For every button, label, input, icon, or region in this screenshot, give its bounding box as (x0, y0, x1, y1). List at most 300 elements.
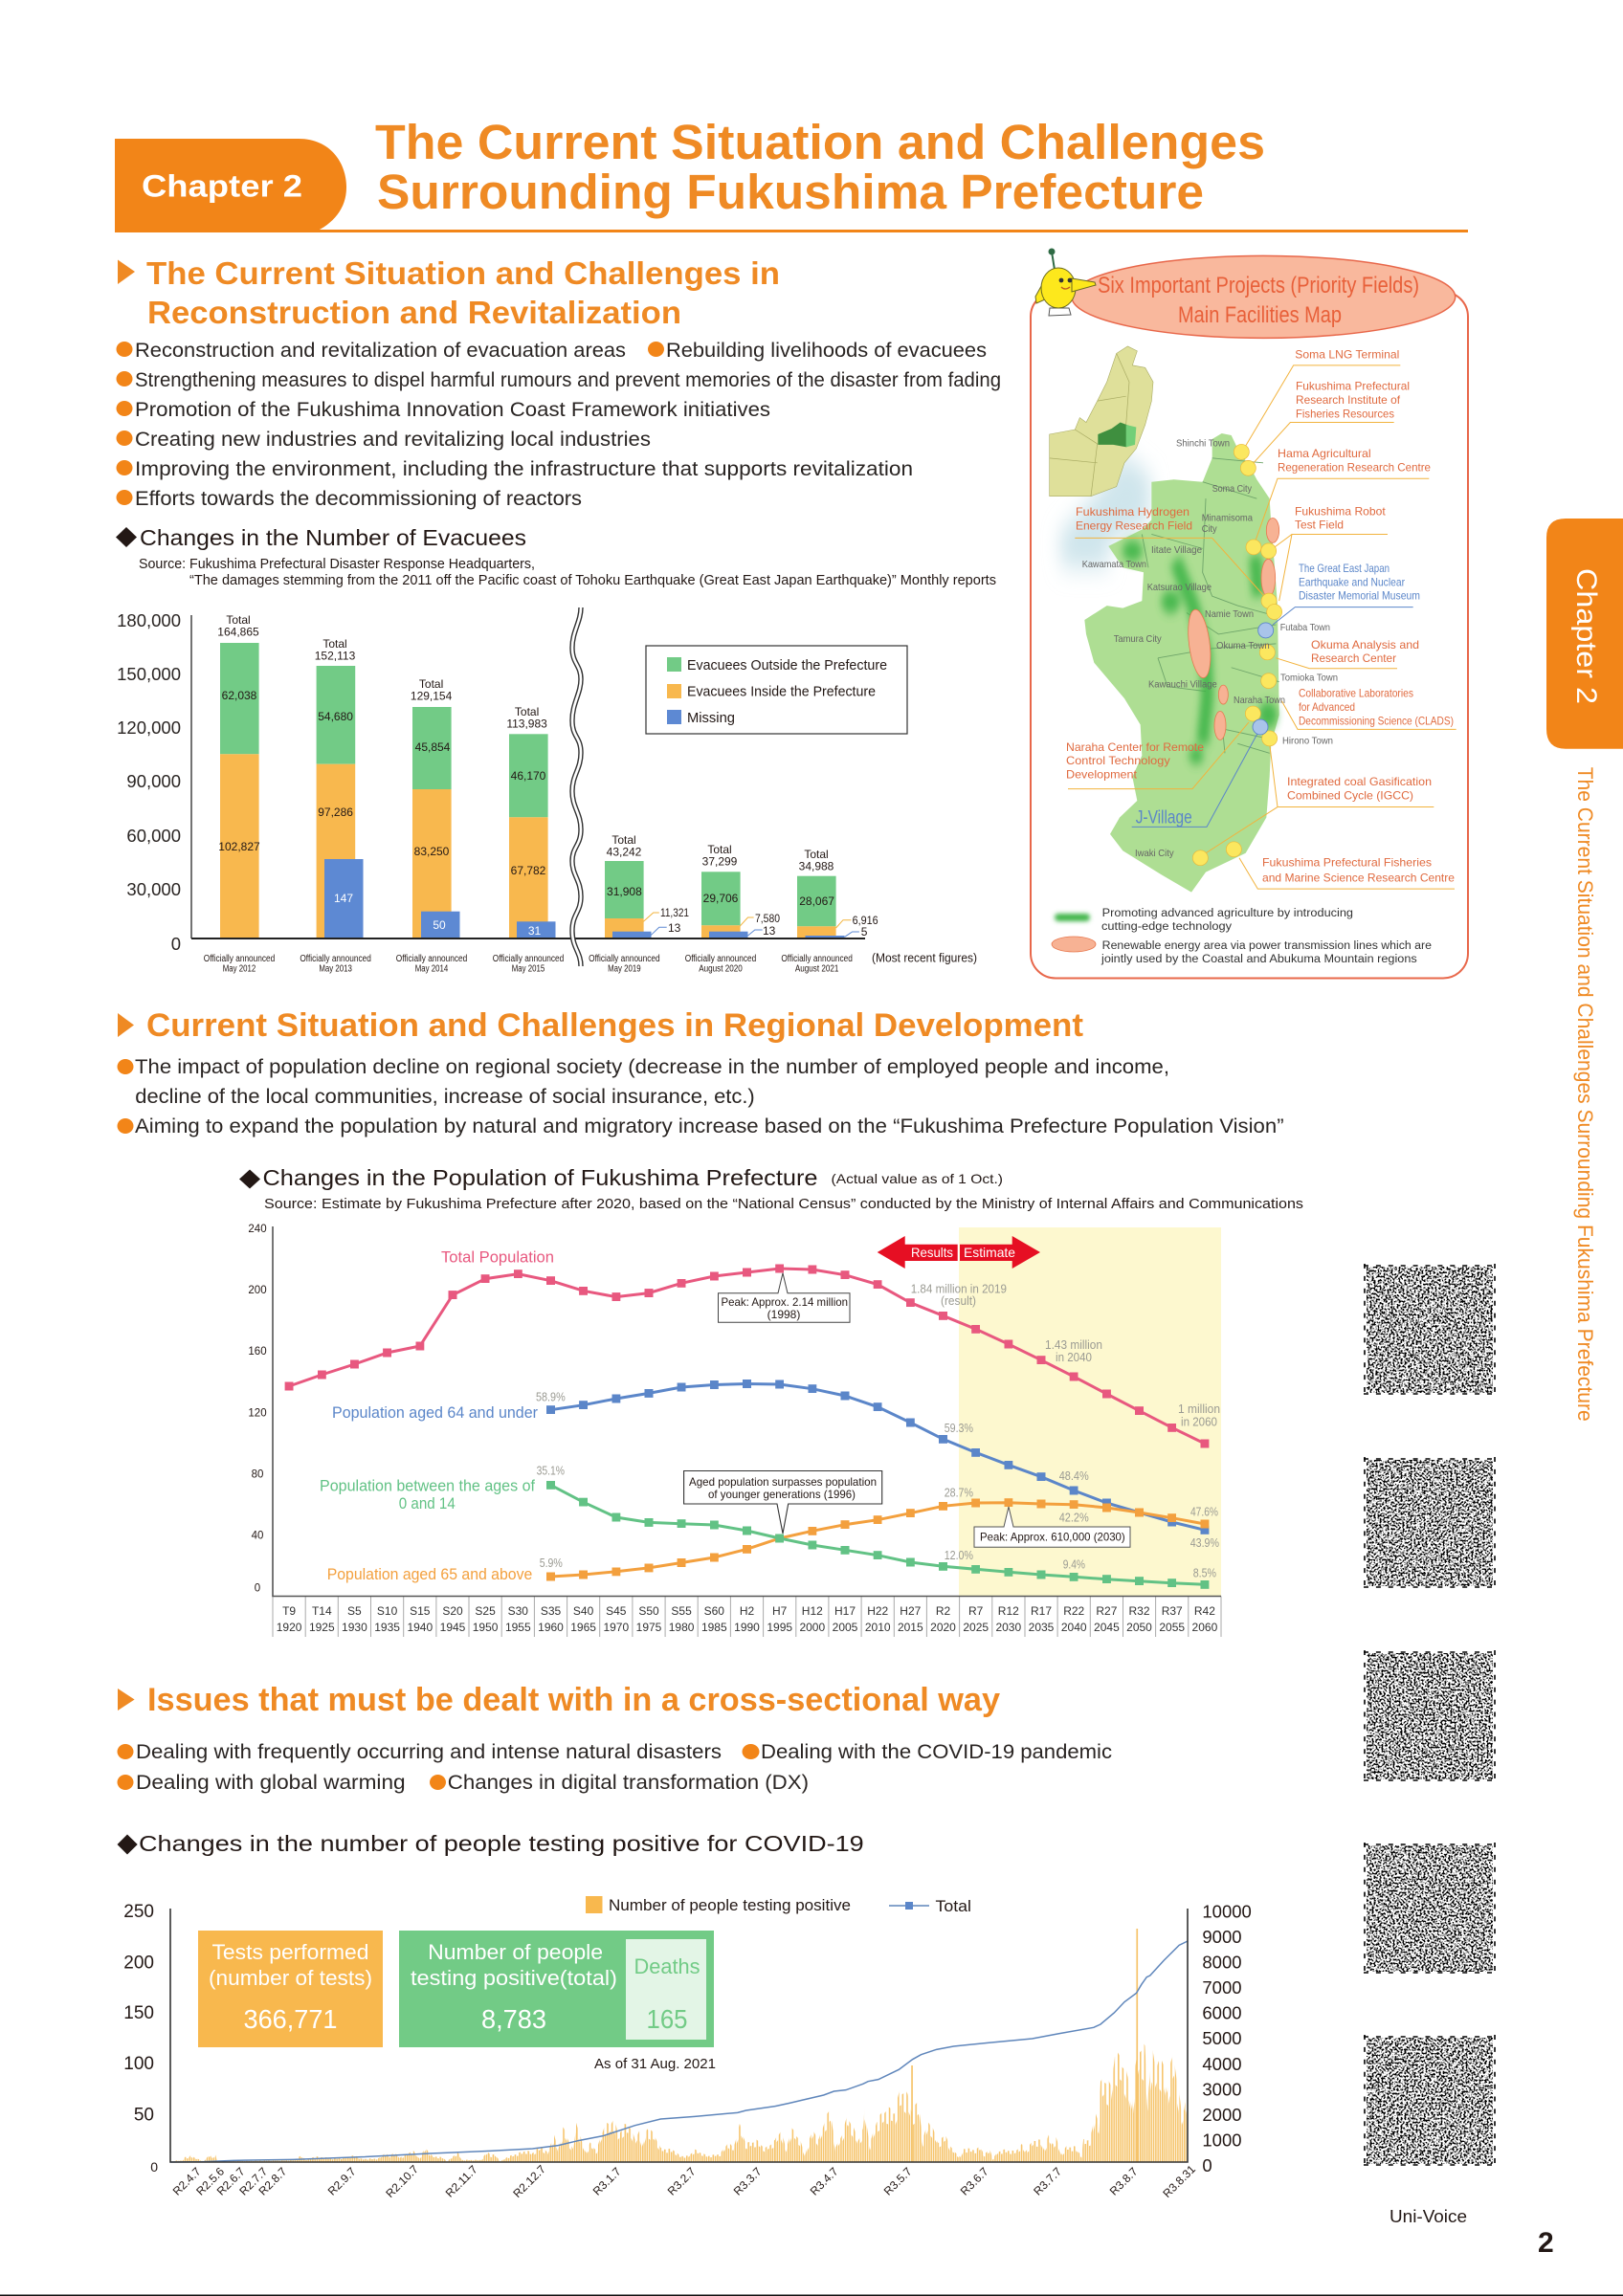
percentage and figure annotations: 35.1% (537, 1465, 565, 1478)
percentage and figure annotations: 42.2% (1059, 1512, 1089, 1525)
percentage and figure annotations: 12.0% (945, 1549, 973, 1562)
percentage and figure annotations: 9.4% (1063, 1558, 1085, 1572)
era and year axis labels: S40 (573, 1604, 594, 1618)
voice code 4 (1364, 1843, 1496, 1975)
series labels: Population aged 65 and above (327, 1565, 532, 1583)
small value labels: 5 (861, 925, 868, 938)
municipal borders (1142, 458, 1279, 753)
facility labels (1066, 347, 1455, 885)
facility labels: Research Center (1311, 651, 1396, 665)
left axis labels: 250 (123, 1902, 154, 1922)
category labels: May 2015 (512, 964, 545, 974)
side tab: chapter 2 (1546, 519, 1623, 749)
callout: peak 610,000 (974, 1507, 1130, 1547)
box: tests performed: (number of tests) (209, 1966, 372, 1990)
era and year axis labels: T14 (312, 1604, 332, 1618)
bullet list: cross-sectional issues: Dealing with the COVID-19 pandemic (761, 1741, 1112, 1763)
category labels: May 2013 (319, 964, 352, 974)
percentage and figure annotations: 43.9% (1190, 1536, 1219, 1550)
bar value labels: 28,067 (799, 894, 834, 908)
right axis labels: 0 (1202, 2155, 1212, 2175)
category labels: August 2021 (795, 964, 839, 974)
small value labels: 6,916 (853, 914, 878, 927)
era and year axis labels: 2020 (930, 1621, 956, 1634)
box: positive total and deaths: 8,783 (481, 2004, 546, 2034)
heading: changes in population: (Actual value as of 1 Oct.) (831, 1171, 1003, 1186)
town labels (1082, 437, 1338, 859)
facility labels: Control Technology (1066, 754, 1170, 767)
chapter tab (115, 139, 346, 232)
series: population between 0 and 14 (551, 1485, 1205, 1584)
series labels (320, 1247, 554, 1583)
percentage and figure annotations: 8.5% (1193, 1567, 1216, 1580)
era and year axis labels: R37 (1162, 1604, 1183, 1618)
category labels: May 2012 (223, 964, 256, 974)
era and year axis labels: R32 (1128, 1604, 1150, 1618)
era and year axis labels: S10 (377, 1604, 398, 1618)
era and year axis labels: S35 (541, 1604, 561, 1618)
facility labels: Decommissioning Science (CLADS) (1299, 714, 1454, 727)
bar value labels: 83,250 (414, 845, 450, 858)
side tab: chapter 2: Chapter 2 (1570, 568, 1602, 704)
facility labels: Fukushima Prefectural (1296, 380, 1410, 393)
percentage and figure annotations: in 2040 (1056, 1351, 1092, 1364)
bars blue (324, 859, 844, 938)
facility labels: Naraha Center for Remote (1066, 740, 1204, 754)
era and year axis labels: 2040 (1061, 1621, 1087, 1634)
bullet list: cross-sectional issues (117, 1741, 1112, 1794)
heading: covid-19: Changes in the number of people testing positive for COVID-19 (139, 1831, 864, 1856)
uni-voice label: Uni-Voice (1390, 2207, 1467, 2226)
category labels: Officially announced (300, 954, 371, 964)
era and year axis labels: 2030 (995, 1621, 1021, 1634)
date labels: R2.11.7 (443, 2162, 480, 2200)
date labels: R2.8.7 (256, 2164, 290, 2198)
deaths box: 165 (647, 2004, 687, 2034)
era and year axis labels: S45 (606, 1604, 627, 1618)
town labels: City (1202, 523, 1217, 535)
era and year axis labels: 2045 (1094, 1621, 1120, 1634)
axes (170, 1909, 1188, 2162)
right axis labels: 3000 (1202, 2079, 1242, 2099)
era and year axis labels: 1930 (342, 1621, 367, 1634)
date labels: R2.9.7 (325, 2164, 359, 2198)
era and year axis labels: 2015 (898, 1621, 923, 1634)
town labels: Kawauchi Village (1148, 679, 1217, 691)
map frame (1031, 292, 1468, 978)
total labels: 129,154 (411, 689, 453, 702)
y axis labels: 200 (248, 1285, 267, 1296)
era and year axis labels: S60 (704, 1604, 724, 1618)
map title ellipse (1072, 255, 1456, 338)
bullet list: reconstruction: Efforts towards the decommissioning of reactors (135, 488, 582, 510)
page number: 2 (1538, 2227, 1554, 2259)
small value labels: 13 (763, 924, 776, 938)
total labels: Total (707, 843, 732, 856)
town labels: Shinchi Town (1176, 437, 1230, 449)
era and year axis labels: H12 (802, 1604, 823, 1618)
y axis labels: 90,000 (126, 771, 181, 791)
era and year axis labels: H2 (740, 1604, 754, 1618)
bullet list: reconstruction: Promotion of the Fukushima Innovation Coast Framework initiatives (135, 399, 770, 421)
left axis labels: 200 (123, 1954, 154, 1974)
daily positive bars (170, 1929, 1187, 2162)
box: positive total and deaths: testing positive(total) (411, 1966, 617, 1990)
era and year axis labels: 2000 (799, 1621, 825, 1634)
voice code 3 (1364, 1650, 1496, 1782)
era and year axis labels: H17 (834, 1604, 856, 1618)
heading: changes in number of evacuees: Source: Fukushima Prefectural Disaster Response Headquarters, (139, 557, 535, 572)
facility labels: The Great East Japan (1299, 562, 1390, 575)
facility labels: Integrated coal Gasification (1287, 775, 1432, 788)
percentage and figure annotations: 58.9% (536, 1391, 566, 1404)
right axis labels: 10000 (1202, 1901, 1252, 1921)
y axis labels: 60,000 (126, 826, 181, 846)
date labels: R3.8.7 (1107, 2164, 1141, 2198)
percentage and figure annotations: 1.43 million (1045, 1338, 1102, 1352)
facility labels: Development (1066, 768, 1138, 782)
town labels: Tamura City (1114, 633, 1162, 645)
era and year axis labels: 2035 (1029, 1621, 1055, 1634)
facility labels: Disaster Memorial Museum (1299, 589, 1420, 603)
results / estimate arrows (878, 1236, 1040, 1269)
town labels: Futaba Town (1280, 622, 1330, 633)
era and year axis labels: S5 (347, 1604, 362, 1618)
date labels: R2.6.7 (214, 2164, 248, 2198)
bar value labels: 31,908 (607, 885, 642, 898)
heading: changes in number of evacuees: “The damages stemming from the 2011 off the Pacific coast of Tohoku Earthquake (Great East Japan Earthquake)” Monthly reports (189, 573, 996, 588)
era and year axis labels: 1935 (374, 1621, 400, 1634)
box: tests performed: Tests performed (212, 1940, 369, 1964)
series labels: Population between the ages of (320, 1476, 535, 1494)
bars orange (220, 754, 836, 938)
era and year axis labels: 1945 (440, 1621, 466, 1634)
section heading: regional development: Current Situation and Challenges in Regional Development (146, 1007, 1083, 1044)
axis break (572, 607, 581, 966)
box: positive total and deaths (399, 1931, 714, 2047)
callout: peak 610,000: Peak: Approx. 610,000 (2030) (980, 1531, 1125, 1544)
date labels: R2.4.7 (170, 2164, 204, 2198)
map legend: cutting-edge technology (1101, 921, 1232, 933)
bullet list: regional development: decline of the local communities, increase of social insurance, etc.) (135, 1086, 755, 1108)
percentage and figure annotations: (result) (941, 1294, 976, 1308)
era and year axis labels: 1960 (538, 1621, 564, 1634)
bullet list: cross-sectional issues: Changes in digital transformation (DX) (448, 1772, 809, 1794)
small value leaders (643, 913, 859, 937)
right axis labels: 7000 (1202, 1977, 1242, 1998)
percentage and figure annotations: 59.3% (945, 1422, 973, 1435)
category labels: Officially announced (493, 954, 564, 964)
bar value labels: 45,854 (415, 740, 451, 754)
map title ellipse: Main Facilities Map (1178, 302, 1342, 328)
bar value labels: 46,170 (511, 769, 546, 783)
as-of note: As of 31 Aug. 2021 (594, 2056, 716, 2072)
bullet list: cross-sectional issues: Dealing with global warming (136, 1772, 406, 1794)
facility labels: Soma LNG Terminal (1295, 347, 1399, 361)
date labels: R3.8.31 (1160, 2162, 1198, 2200)
bar value labels: 97,286 (318, 806, 353, 819)
date labels: R3.1.7 (590, 2164, 624, 2198)
category labels: Officially announced (685, 954, 756, 964)
bullet list: reconstruction: Reconstruction and revitalization of evacuation areas (135, 340, 626, 362)
date labels: R2.12.7 (510, 2162, 548, 2200)
facility labels: for Advanced (1299, 700, 1355, 714)
bullet list: regional development: The impact of population decline on regional society (decrease in the number of employed people and income, (135, 1056, 1169, 1078)
callout: peak 2.14 million: Peak: Approx. 2.14 million (722, 1295, 848, 1309)
bullet list: regional development (117, 1056, 1284, 1137)
date labels: R2.10.7 (383, 2162, 421, 2200)
mascot (1035, 249, 1096, 316)
facility labels: and Marine Science Research Centre (1262, 872, 1455, 885)
axes (273, 1596, 1221, 1637)
era and year axis labels: R17 (1031, 1604, 1052, 1618)
y axis labels: 30,000 (126, 879, 181, 899)
bar value labels: 102,827 (218, 840, 260, 853)
callout: peak 2.14 million (718, 1273, 850, 1322)
era and year axis labels: 2010 (865, 1621, 891, 1634)
town labels: Hirono Town (1282, 735, 1333, 746)
percentage and figure annotations: 5.9% (540, 1556, 563, 1570)
bar value labels: 54,680 (318, 710, 353, 723)
chart legend: Total (936, 1897, 971, 1915)
results / estimate arrows: Estimate (964, 1245, 1015, 1260)
right axis labels: 8000 (1202, 1952, 1242, 1973)
series labels: 0 and 14 (399, 1494, 456, 1512)
category labels (204, 951, 977, 974)
right axis labels: 1000 (1202, 2130, 1242, 2151)
bar value labels: 62,038 (222, 689, 257, 702)
town labels: Namie Town (1205, 608, 1254, 620)
right axis labels: 2000 (1202, 2105, 1242, 2125)
y axis labels: 120,000 (117, 718, 181, 738)
facility labels: Fisheries Resources (1296, 408, 1394, 421)
bullet list: reconstruction: Improving the environment, including the infrastructure that supports revitalization (135, 458, 913, 480)
total labels (217, 613, 834, 872)
total labels: 164,865 (217, 626, 259, 639)
total line (170, 1941, 1188, 2162)
era and year axis labels: H27 (900, 1604, 922, 1618)
estimate background (959, 1227, 1221, 1596)
facility labels: Fukushima Prefectural Fisheries (1262, 856, 1432, 870)
facility labels: Energy Research Field (1076, 519, 1192, 532)
pale sea (1059, 453, 1151, 567)
voice code 1 (1364, 1264, 1496, 1396)
era and year axis labels: 2005 (833, 1621, 858, 1634)
era and year axis labels: 1925 (309, 1621, 335, 1634)
left axis labels: 0 (150, 2159, 158, 2175)
era and year axis labels: 1950 (473, 1621, 499, 1634)
voice code 5 (1364, 2035, 1496, 2167)
series labels: Population aged 64 and under (332, 1403, 538, 1422)
box: positive total and deaths: Number of people (428, 1940, 603, 1964)
y axis labels: 160 (248, 1346, 267, 1358)
date labels (170, 2162, 1198, 2200)
bar value labels: 29,706 (703, 892, 739, 905)
percentage and figure annotations: 1.84 million in 2019 (911, 1282, 1007, 1295)
era and year axis labels: R12 (998, 1604, 1019, 1618)
category labels: May 2014 (415, 964, 449, 974)
era and year axis labels: 1975 (636, 1621, 662, 1634)
series: population aged 65 and above (551, 1503, 1205, 1577)
chart legend (586, 1896, 971, 1915)
percentage and figure annotations: in 2060 (1181, 1416, 1217, 1429)
facility labels: Fukushima Hydrogen (1076, 505, 1189, 519)
facility labels: Test Field (1295, 519, 1344, 532)
main title: The Current Situation and Challenges (375, 115, 1265, 169)
era and year axis labels: S15 (410, 1604, 431, 1618)
heading: changes in population: Source: Estimate by Fukushima Prefecture after 2020, based on the “National Census” conducted by the Ministry of Internal Affairs and Communications (264, 1196, 1303, 1212)
percentage and figure annotations: 28.7% (945, 1487, 973, 1500)
total labels: Total (804, 848, 829, 861)
chapter header (115, 115, 1468, 232)
town labels: Tomioka Town (1280, 673, 1338, 684)
bar value labels: 31 (528, 924, 541, 938)
y axis labels: 80 (252, 1469, 263, 1481)
map title ellipse: Six Important Projects (Priority Fields) (1098, 273, 1419, 298)
panel: facilities map (1031, 249, 1468, 978)
box: tests performed: 366,771 (243, 2004, 337, 2034)
section heading: reconstruction: The Current Situation and Challenges in (146, 255, 780, 291)
main title: Surrounding Fukushima Prefecture (377, 165, 1204, 219)
stacked bar chart: evacuees (117, 607, 977, 974)
heading: changes in population: Changes in the Population of Fukushima Prefecture (262, 1165, 817, 1190)
main title (375, 115, 1265, 219)
facility labels: Earthquake and Nuclear (1299, 576, 1405, 589)
side title: The Current Situation and Challenges Surrounding Fukushima Prefecture (1573, 767, 1597, 1422)
box: tests performed (198, 1931, 383, 2047)
facility markers (1192, 444, 1282, 866)
y axis labels: 240 (248, 1224, 267, 1235)
town labels: Naraha Town (1234, 695, 1285, 706)
era and year axis labels: R7 (968, 1604, 984, 1618)
bar value labels: 50 (433, 918, 446, 932)
bullet list: reconstruction: Creating new industries and revitalizing local industries (135, 429, 651, 451)
bar value labels: 147 (334, 892, 353, 905)
map legend: Promoting advanced agriculture by introducing (1102, 908, 1353, 919)
facility labels: Okuma Analysis and (1311, 638, 1419, 651)
right axis labels: 6000 (1202, 2003, 1242, 2023)
date labels: R2.7.7 (236, 2164, 270, 2198)
y axis labels: 0 (171, 934, 181, 954)
category labels: August 2020 (699, 964, 743, 974)
heading: changes in number of evacuees: Changes in the Number of Evacuees (140, 525, 526, 550)
fukushima coast region (1084, 433, 1279, 893)
heading: changes in population (239, 1165, 1303, 1212)
era and year axis labels: S55 (671, 1604, 692, 1618)
category labels: Officially announced (589, 954, 660, 964)
town labels: Minamisoma (1202, 513, 1253, 524)
map legend: jointly used by the Coastal and Abukuma Mountain regions (1101, 954, 1417, 965)
era and year axis labels: R22 (1063, 1604, 1085, 1618)
bullet list: reconstruction: Strengthening measures to dispel harmful rumours and prevent memories of the disaster from fading (135, 369, 1001, 391)
small value labels: 11,321 (660, 906, 689, 919)
y axis labels: 150,000 (117, 664, 181, 684)
town labels: Katsurao Village (1147, 582, 1212, 593)
facility labels: Fukushima Robot (1295, 505, 1386, 519)
section heading: reconstruction: Reconstruction and Revitalization (147, 295, 681, 330)
era and year axis labels: R27 (1096, 1604, 1118, 1618)
section heading: reconstruction (118, 255, 780, 330)
bullet list: reconstruction (117, 340, 1001, 510)
heading: changes in number of evacuees (116, 525, 996, 588)
percentage and figure annotations (536, 1282, 1220, 1580)
percentage and figure annotations: 1 million (1178, 1402, 1220, 1416)
deaths box (626, 1939, 706, 2040)
era and year axis labels: R2 (936, 1604, 950, 1618)
results / estimate arrows: Results (911, 1245, 953, 1260)
renewable energy areas (1185, 519, 1279, 740)
era and year axis labels: 1965 (570, 1621, 596, 1634)
small value labels: 13 (668, 921, 681, 935)
callout: aged population surpasses: of younger generations (1996) (708, 1488, 856, 1501)
era and year axis labels (277, 1604, 1218, 1634)
total labels: Total (419, 677, 443, 691)
agriculture zones (1123, 541, 1278, 764)
voice code 2 (1364, 1457, 1496, 1589)
deaths box: Deaths (634, 1954, 700, 1978)
right axis labels (1202, 1901, 1252, 2175)
era and year axis labels: 2050 (1126, 1621, 1152, 1634)
category labels: Officially announced (396, 954, 467, 964)
era and year axis labels: 1995 (767, 1621, 792, 1634)
era and year axis labels: H22 (867, 1604, 889, 1618)
y axis labels: 40 (252, 1531, 263, 1542)
bullet list: regional development: Aiming to expand the population by natural and migratory increase based on the “Fukushima Prefecture Population Vision” (135, 1115, 1284, 1137)
y axis labels: 120 (248, 1408, 267, 1420)
map legend (1052, 908, 1432, 965)
left axis labels (123, 1902, 158, 2175)
total labels: Total (322, 637, 347, 651)
era and year axis labels: 1980 (669, 1621, 695, 1634)
era and year axis labels: S25 (475, 1604, 496, 1618)
date labels: R3.6.7 (958, 2164, 991, 2198)
percentage and figure annotations: 48.4% (1059, 1469, 1089, 1483)
total labels: 43,242 (607, 846, 642, 859)
facility labels: J-Village (1136, 807, 1192, 828)
map legend: Renewable energy area via power transmission lines which are (1102, 940, 1432, 952)
era and year axis labels: S20 (442, 1604, 463, 1618)
callout: peak 2.14 million: (1998) (767, 1308, 800, 1321)
line chart: population (248, 1224, 1221, 1637)
category labels: Officially announced (204, 954, 275, 964)
date labels: R3.4.7 (808, 2164, 841, 2198)
left axis labels: 150 (123, 2003, 154, 2023)
era and year axis labels: S30 (508, 1604, 528, 1618)
percentage and figure annotations: 47.6% (1190, 1506, 1218, 1519)
date labels: R3.2.7 (665, 2164, 699, 2198)
town labels: Kawamata Town (1082, 559, 1146, 570)
left axis labels: 50 (134, 2106, 154, 2126)
bullet list: reconstruction: Rebuilding livelihoods of evacuees (666, 340, 987, 362)
era and year axis labels: H7 (772, 1604, 788, 1618)
facility labels: Combined Cycle (IGCC) (1287, 789, 1413, 803)
town labels: Iitate Village (1151, 544, 1202, 556)
date labels: R3.7.7 (1031, 2164, 1064, 2198)
era and year axis labels: 1940 (407, 1621, 433, 1634)
era and year axis labels: 2055 (1159, 1621, 1185, 1634)
date labels: R2.5.6 (193, 2164, 227, 2198)
total labels: Total (226, 613, 251, 627)
leader lines (1068, 365, 1456, 889)
right axis labels: 5000 (1202, 2028, 1242, 2048)
series: total population (289, 1269, 1205, 1444)
total labels: Total (515, 705, 539, 718)
total labels: Total (611, 833, 636, 847)
era and year axis labels: 1985 (701, 1621, 727, 1634)
chart legend: Number of people testing positive (609, 1896, 851, 1914)
y axis labels (248, 1224, 267, 1595)
category labels: Officially announced (781, 954, 853, 964)
